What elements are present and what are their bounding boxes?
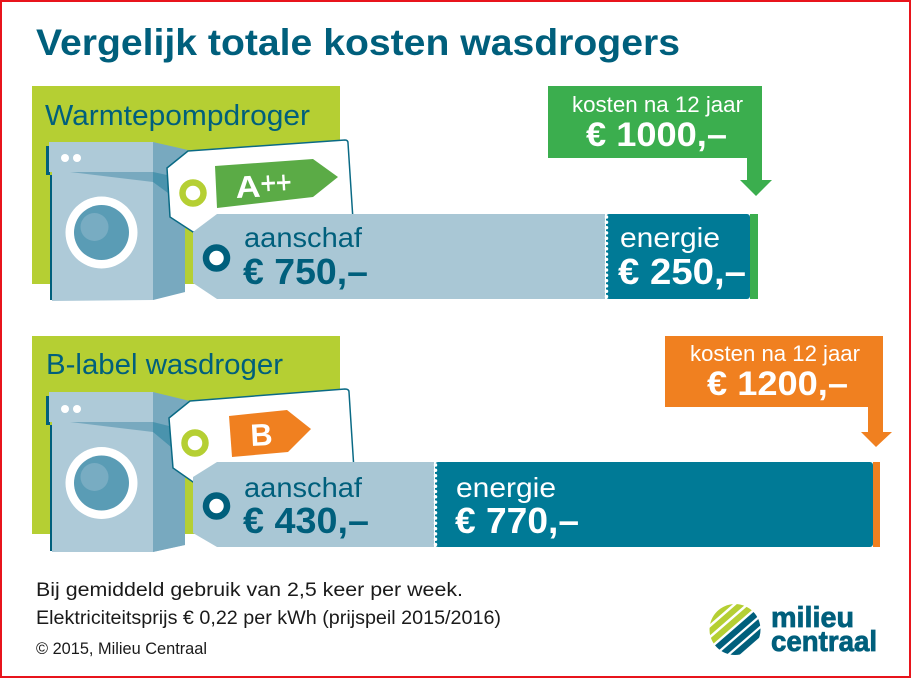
icon: washing machine (46, 392, 190, 552)
logo text: milieu (771, 602, 854, 634)
energy bar 250: energie (620, 222, 720, 253)
footnote: Elektriciteitsprijs € 0,22 per kWh (prijspeil 2015/2016) (36, 608, 501, 629)
price tag: aanschaf 430: aanschaf (244, 472, 362, 503)
green background (32, 86, 340, 284)
arrow: green (740, 158, 772, 196)
energy tag B: B (250, 417, 273, 453)
icon: washing machine (46, 142, 188, 301)
energy bar 770 (435, 462, 880, 547)
callout: kosten 1200: € 1200,– (707, 365, 848, 403)
energy tag A++: A (235, 169, 261, 205)
energy bar 770: € 770,– (455, 500, 579, 541)
panel: warmtepompdroger (32, 86, 772, 301)
logo: milieu centraal: centraal (771, 626, 877, 658)
price tag: aanschaf 750: € 750,– (243, 251, 368, 292)
energy bar 250: € 250,– (618, 251, 746, 292)
callout: kosten 1200: kosten na 12 jaar (690, 341, 860, 366)
energy tag A++ (167, 140, 353, 232)
logo: milieu centraal (710, 604, 876, 655)
price tag: aanschaf 430: € 430,– (243, 500, 369, 541)
arrow: orange (861, 407, 892, 447)
footnote: © 2015, Milieu Centraal (36, 640, 207, 658)
energy tag A++: ++ (260, 164, 292, 201)
callout: kosten 1000 (548, 86, 762, 158)
heading: b-label wasdroger: B-label wasdroger (46, 349, 283, 381)
price tag: aanschaf 750 (193, 214, 605, 299)
logo mark (710, 604, 760, 655)
energy bar 770: energie (456, 472, 556, 503)
footnote (36, 580, 501, 658)
energy tag B (169, 389, 354, 482)
callout: kosten 1200 (665, 336, 883, 407)
heading: warmtepompdroger: Warmtepompdroger (45, 100, 310, 132)
energy bar 250 (606, 214, 758, 299)
panel: b-label wasdroger (32, 336, 892, 552)
price tag: aanschaf 750: aanschaf (244, 222, 362, 253)
price tag: aanschaf 430 (193, 462, 434, 547)
green background (32, 336, 340, 534)
callout: kosten 1000: kosten na 12 jaar (572, 92, 743, 117)
footnote: Bij gemiddeld gebruik van 2,5 keer per week. (36, 580, 463, 601)
callout: kosten 1000: € 1000,– (586, 116, 727, 154)
title: Vergelijk totale kosten wasdrogers (36, 22, 680, 63)
